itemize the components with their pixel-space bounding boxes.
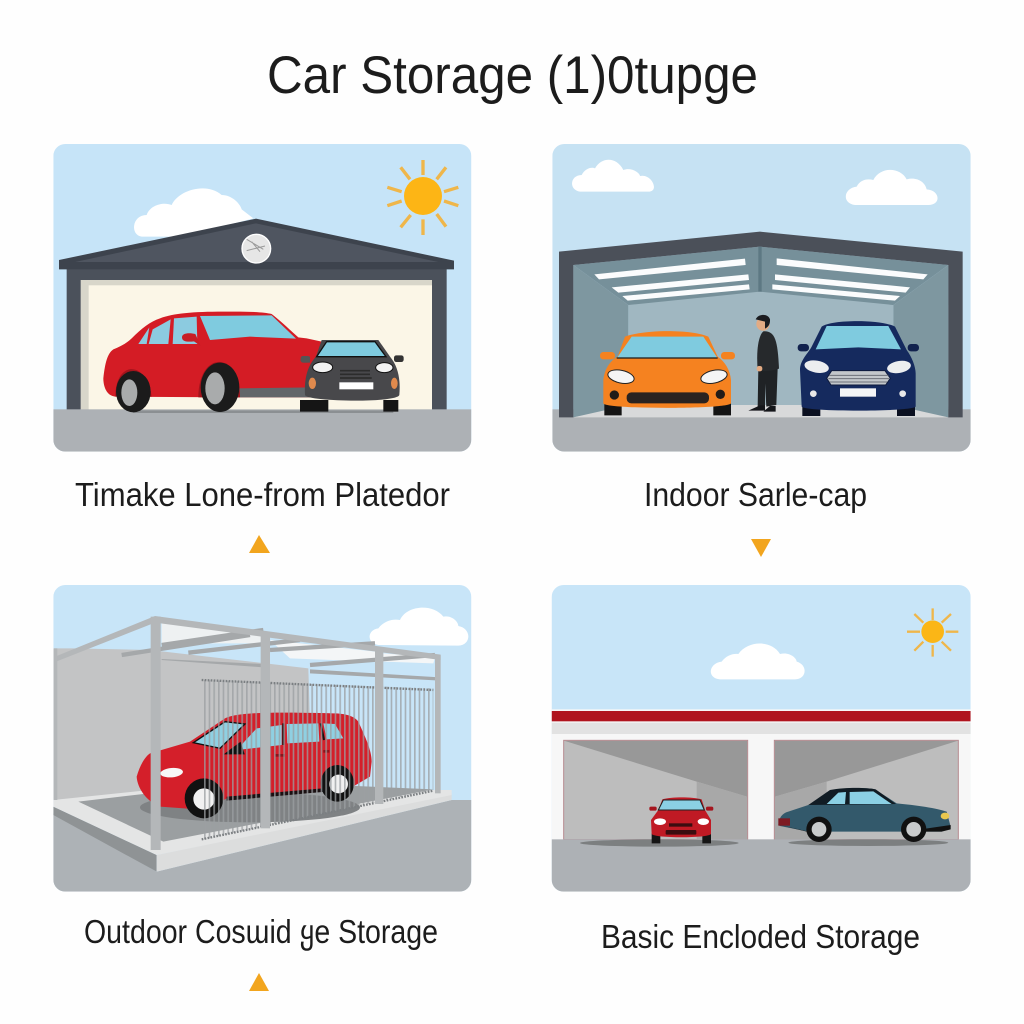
arrow up	[249, 535, 270, 553]
ground	[53, 800, 471, 892]
black compact car	[300, 340, 404, 412]
icon: clock	[242, 234, 271, 263]
arrow down	[751, 539, 771, 557]
ground	[53, 409, 471, 452]
building	[552, 709, 971, 843]
small red car	[649, 797, 713, 843]
back wall	[53, 648, 312, 800]
car shadow	[140, 792, 360, 822]
arrow up	[249, 973, 269, 991]
carport structure	[559, 232, 963, 417]
panel: garage with two cars	[53, 144, 471, 452]
cloud	[711, 643, 805, 679]
slatted fence	[202, 680, 433, 840]
red hatchback	[137, 713, 372, 818]
panel: outdoor covered storage	[53, 585, 471, 892]
cloud	[370, 608, 468, 646]
title: Car Storage (1)0tupge	[267, 46, 758, 105]
navy car	[798, 321, 919, 416]
cloud	[134, 188, 253, 237]
label: enclosed: Basic Encloded Storage	[601, 918, 920, 955]
right bay	[774, 740, 958, 840]
panel: indoor carport with two cars and person	[552, 144, 971, 452]
label: outdoor: Outdoor Cosɯid ყe Storage	[84, 913, 438, 951]
ground	[552, 409, 971, 452]
teal coupe	[778, 788, 951, 842]
cloud left	[572, 160, 654, 192]
panel: basic enclosed storage	[552, 585, 971, 892]
ground	[552, 839, 971, 892]
steel frame	[54, 616, 441, 850]
concrete slab	[53, 784, 452, 872]
label: garage: Timake Lone-from Platedor	[75, 476, 450, 513]
red sedan	[103, 312, 322, 412]
orange car	[600, 331, 735, 415]
label: indoor: Indoor Sarle-cap	[644, 476, 867, 513]
icon: sun	[907, 608, 958, 657]
left bay	[564, 740, 748, 840]
person in suit	[748, 315, 779, 412]
icon: sun	[387, 160, 458, 235]
cloud right	[846, 170, 938, 205]
garage building	[59, 219, 454, 410]
